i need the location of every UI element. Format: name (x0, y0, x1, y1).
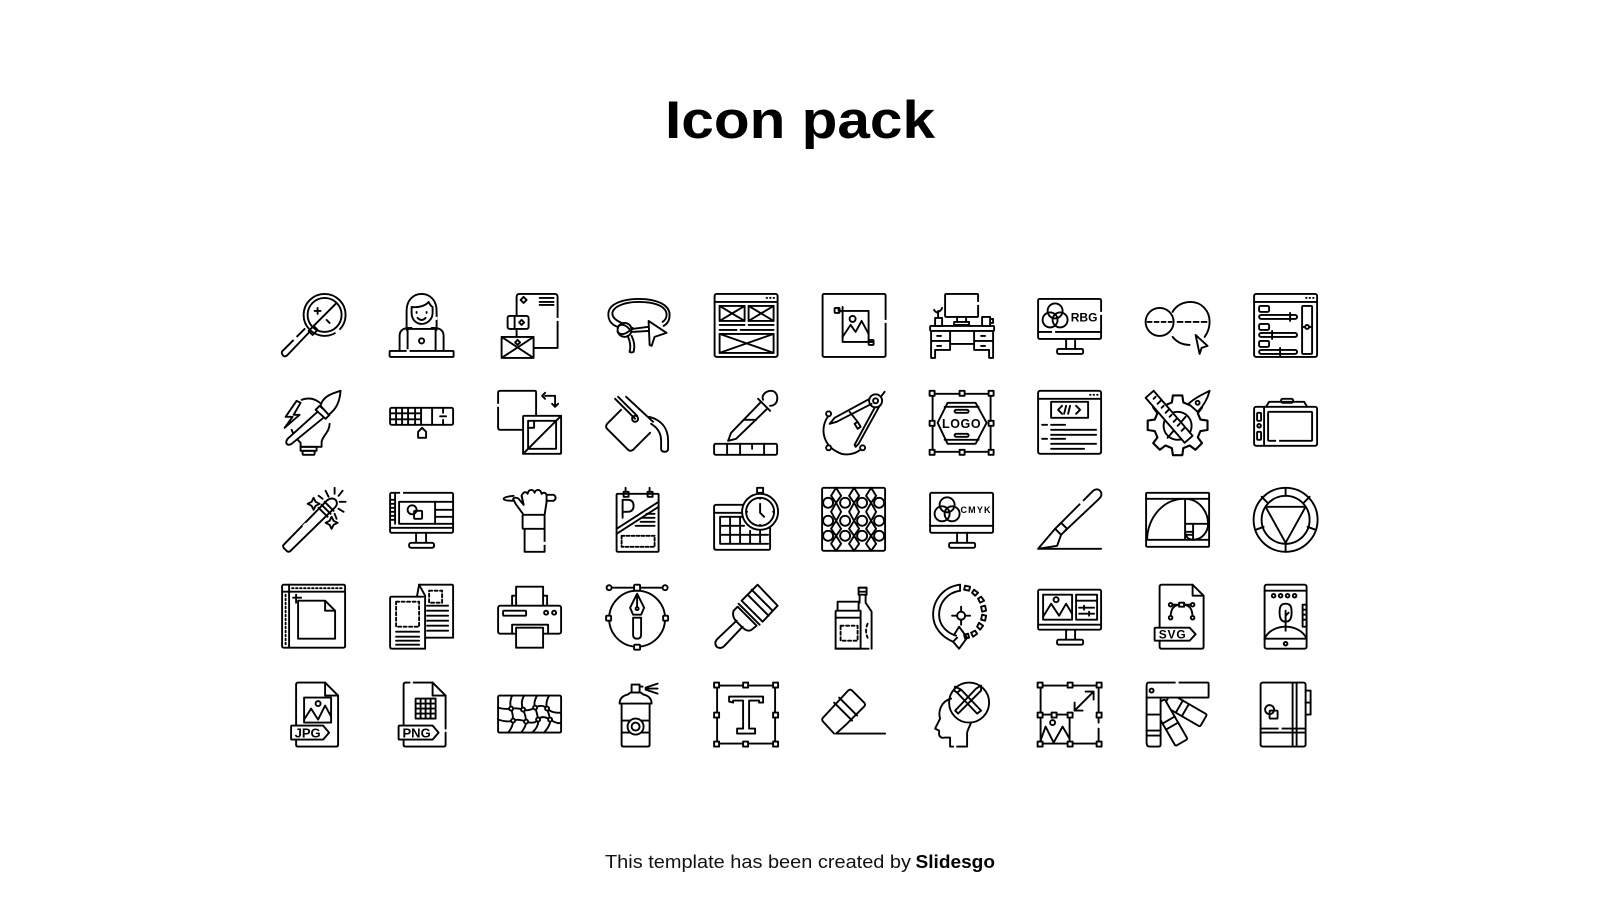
icon: swap layers (498, 391, 561, 454)
icon: precision knife (1038, 489, 1101, 549)
icon: designer at laptop (390, 294, 454, 357)
icon: logo frame: LOGO (942, 417, 981, 431)
icon: pen tool circle (606, 585, 668, 650)
icon: mobile tablet (1265, 585, 1307, 649)
icon: JPG file: JPG (295, 726, 321, 741)
icon: notebook (1261, 683, 1311, 747)
icon: eyedropper (714, 391, 777, 455)
icon: RGB monitor (1038, 299, 1101, 354)
icon: calendar stopwatch (714, 488, 778, 550)
icon: hand holding stylus (504, 490, 556, 552)
icon: logo frame (930, 391, 994, 455)
icon: designer head (935, 683, 989, 747)
icon: color swatches (1147, 683, 1209, 747)
icon: magnifier (282, 294, 346, 356)
icon: sliders window (1254, 294, 1317, 357)
icon: designer desk (930, 294, 994, 358)
title: Icon pack (665, 91, 936, 150)
icon: printer (498, 587, 561, 648)
icon: lasso tool (608, 299, 670, 352)
icon: SVG file (1155, 585, 1204, 649)
icon: color gradient bar (390, 408, 453, 438)
icon: app monitor (390, 493, 453, 548)
icon: text frame (714, 683, 778, 747)
icon: idea bulb with brush (285, 391, 341, 455)
icon: mesh warp (498, 696, 561, 733)
icon: golden ratio (1146, 493, 1209, 547)
icon: magic wand (283, 488, 346, 552)
icon: spray can (620, 684, 658, 747)
icon: pattern (822, 488, 885, 551)
icon: paint bucket (606, 397, 668, 452)
icon: image editor monitor (1038, 590, 1101, 645)
icon grid (282, 294, 1318, 747)
icon: brochure pages (390, 585, 453, 649)
icon: RGB monitor: RBG (1071, 310, 1097, 324)
icon: CMYK monitor (930, 493, 993, 548)
icon: rotate (933, 585, 986, 649)
footer credit: Slidesgo (916, 851, 995, 872)
icon: resize image (1038, 683, 1102, 747)
icon: PNG file: PNG (403, 726, 431, 741)
footer credit: This template has been created by (605, 851, 912, 872)
icon: SVG file: SVG (1159, 628, 1186, 642)
icon: JPG file (291, 683, 338, 747)
icon: CMYK monitor: CMYK (960, 505, 992, 515)
icon: bottles (836, 588, 872, 649)
icon: design gear (1146, 391, 1210, 455)
icon: paint brush (715, 585, 778, 648)
icon: crop image (823, 294, 886, 357)
icon: wireframe window (715, 294, 778, 357)
icon: eraser (822, 690, 885, 734)
icon: code window (1038, 391, 1101, 454)
icon: poster (617, 488, 659, 552)
icon: artboard (282, 585, 345, 648)
icon: compass (823, 392, 885, 454)
icon: graphics tablet (1254, 399, 1317, 446)
icon: circles with cursor (1146, 302, 1210, 354)
icon: PNG file (399, 683, 446, 747)
icon: color wheel (1254, 488, 1318, 552)
icon: branding mail (502, 294, 558, 358)
